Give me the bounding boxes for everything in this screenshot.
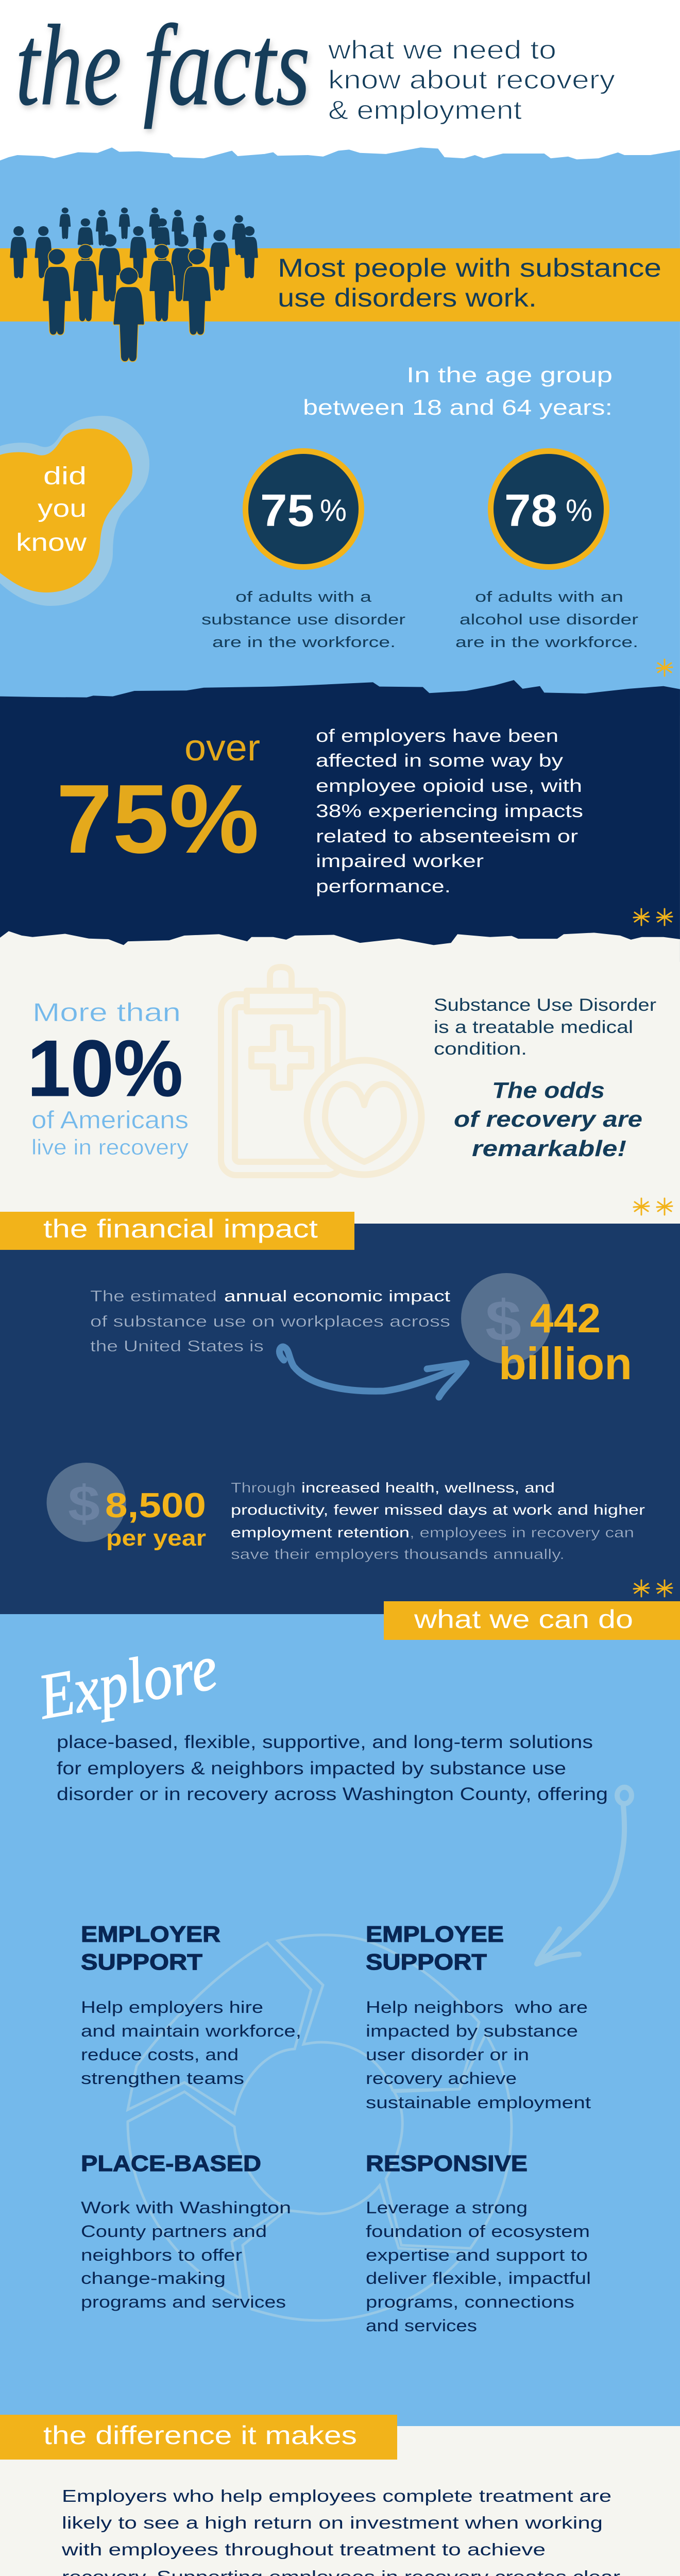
age group heading: between 18 and 64 years:: [303, 395, 613, 419]
text: employers return on investment: with employees throughout treatment to achieve: [61, 2540, 546, 2559]
card: responsive: deliver flexible, impactful: [366, 2269, 591, 2287]
text: employers affected: performance.: [316, 876, 451, 896]
panel: white header background: [0, 0, 680, 206]
stat: 10 percent of Americans: [27, 998, 189, 1159]
icon: circular arrows watermark: [128, 1935, 512, 2320]
heading: the financial impact: [0, 1212, 354, 1250]
panel: did you know section background: [0, 147, 680, 716]
card: responsive: [366, 2151, 591, 2335]
title: facts: [143, 1, 310, 129]
text: employee savings: Through: [231, 1480, 296, 1496]
card: responsive: Leverage a strong: [366, 2198, 528, 2217]
yellow headline band: use disorders work.: [278, 283, 537, 312]
stat: 8,500 per year: 8,500: [105, 1486, 206, 1525]
callout: did you know blob: [0, 416, 149, 606]
card: place-based: Work with Washington: [81, 2198, 291, 2217]
heading: Explore: Explore: [32, 1632, 223, 1733]
text: employers affected: [316, 726, 583, 896]
text: employers affected: related to absenteeism or: [316, 826, 578, 846]
text: employers affected: 38% experiencing impacts: [316, 801, 583, 821]
callout: the odds of recovery: of recovery are: [454, 1107, 642, 1132]
stat: 10 percent of Americans: of Americans: [31, 1107, 189, 1134]
card: employee support: [366, 1922, 591, 2112]
card: responsive: expertise and support to: [366, 2246, 588, 2264]
stat: 75 percent of adults: substance use disorder: [201, 612, 405, 628]
text: employers return on investment: likely to see a high return on investment when working: [62, 2513, 603, 2532]
stat: 442 billion: 442: [530, 1295, 601, 1341]
card: place-based: change-making: [81, 2269, 226, 2287]
heading: the financial impact: the financial impact: [43, 1214, 318, 1243]
stat: 75 percent of adults: 75: [260, 485, 314, 536]
stat: 78 percent of adults: of adults with an: [475, 589, 623, 605]
card: employer support: EMPLOYER: [81, 1922, 220, 1947]
stat: 78 percent of adults: alcohol use disorder: [460, 612, 638, 628]
stat: 8,500 per year: per year: [106, 1526, 206, 1551]
card: employee support: SUPPORT: [366, 1950, 487, 1975]
callout: the odds of recovery: [454, 1078, 642, 1161]
text: explore intro: [57, 1732, 608, 1804]
stat: 8,500 per year: [46, 1463, 206, 1551]
text: employee savings: [231, 1480, 645, 1562]
text: employers return on investment: Employers who help employees complete treatment are: [62, 2486, 611, 2505]
heading: what we can do: [384, 1601, 680, 1640]
panel: the difference it makes section: [0, 2426, 680, 2576]
yellow headline band: [0, 248, 680, 321]
text: explore intro: place-based, flexible, supportive, and long-term solutions: [57, 1732, 593, 1752]
text: employee savings: productivity, fewer missed days at work and higher: [231, 1502, 645, 1518]
panel: what we can do section: [0, 1614, 680, 2426]
callout: did you know blob: know: [16, 529, 87, 556]
card: employer support: SUPPORT: [81, 1950, 202, 1975]
icon: source stars: [634, 1198, 672, 1215]
heading: the difference it makes: [0, 2415, 397, 2460]
stat: 78 percent of adults: [455, 451, 638, 651]
card: employee support: EMPLOYEE: [366, 1922, 504, 1947]
card: employer support: [81, 1922, 301, 2088]
text: employers return on investment: [61, 2486, 620, 2576]
text: annual economic impact: The estimated: [90, 1287, 217, 1305]
text: treatable medical condition: Substance Use Disorder: [434, 995, 656, 1015]
stat: over 75 percent: over: [184, 727, 260, 769]
text: annual economic impact: the United States is: [90, 1337, 264, 1355]
arrow: hand drawn down arrow: [537, 1787, 632, 1964]
text: employers affected: affected in some way by: [316, 751, 564, 771]
age group heading: [303, 363, 613, 419]
icon: source star: [657, 659, 672, 676]
card: employee support: recovery achieve: [366, 2069, 517, 2088]
text: employers affected: employee opioid use, with: [316, 776, 582, 796]
text: treatable medical condition: condition.: [434, 1039, 527, 1059]
card: place-based: programs and services: [81, 2293, 286, 2311]
stat: 442 billion: $: [485, 1289, 521, 1353]
title: [15, 1, 310, 129]
callout: did you know blob: you: [38, 495, 87, 522]
stat: 8,500 per year: $: [68, 1475, 100, 1532]
text: treatable medical condition: [434, 995, 656, 1059]
text: explore intro: disorder or in recovery across Washington County, offering: [57, 1784, 608, 1804]
panel: financial impact section: [0, 1224, 680, 1614]
yellow headline band: Most people with substance: [278, 253, 661, 282]
stat: 78 percent of adults: %: [566, 493, 592, 528]
stat: 78 percent of adults: 78: [504, 485, 557, 536]
stat: 10 percent of Americans: live in recovery: [31, 1135, 189, 1159]
stat: 10 percent of Americans: More than: [32, 998, 181, 1027]
stat: 75 percent of adults: %: [320, 493, 347, 528]
text: annual economic impact: [90, 1287, 451, 1355]
text: explore intro: for employers & neighbors impacted by substance use: [57, 1758, 566, 1778]
stat: over 75 percent: 75%: [56, 765, 259, 874]
card: employer support: and maintain workforce,: [81, 2022, 301, 2040]
card: employee support: user disorder or in: [366, 2045, 529, 2064]
subtitle: [328, 35, 616, 125]
subtitle: know about recovery: [328, 65, 616, 94]
heading: what we can do: what we can do: [414, 1605, 633, 1634]
stat: 442 billion: [461, 1273, 632, 1389]
callout: the odds of recovery: remarkable!: [472, 1136, 626, 1161]
stat: 75 percent of adults: of adults with a: [235, 589, 372, 605]
stat: 442 billion: billion: [499, 1338, 632, 1389]
text: employee savings: save their employers thousands annually.: [231, 1546, 565, 1562]
text: treatable medical condition: is a treatable medical: [434, 1018, 633, 1037]
text: annual economic impact: of substance use on workplaces across: [90, 1312, 450, 1330]
panel: cream recovery section: [0, 931, 680, 1224]
card: employer support: Help employers hire: [81, 1998, 263, 2016]
stat: 78 percent of adults: are in the workforce.: [455, 634, 638, 651]
card: employee support: sustainable employment: [366, 2093, 591, 2112]
stat: 10 percent of Americans: 10%: [27, 1024, 183, 1113]
text: employee savings: , employees in recovery can: [410, 1524, 634, 1540]
card: place-based: [81, 2151, 291, 2311]
text: employee savings: increased health, wellness, and: [301, 1480, 555, 1496]
age group heading: In the age group: [406, 363, 613, 387]
card: employee support: impacted by substance: [366, 2022, 578, 2040]
card: responsive: and services: [366, 2316, 477, 2335]
card: place-based: PLACE-BASED: [81, 2151, 261, 2176]
text: annual economic impact: annual economic impact: [224, 1287, 451, 1305]
text: employee savings: employment retention: [231, 1524, 410, 1540]
card: employer support: reduce costs, and: [81, 2045, 239, 2064]
subtitle: & employment: [328, 95, 522, 125]
icon: source stars: [634, 1580, 672, 1597]
stat: 75 percent of adults: are in the workforce.: [212, 634, 396, 651]
heading: the difference it makes: the difference it makes: [43, 2421, 357, 2450]
panel: dark employers section: [0, 680, 680, 962]
subtitle: what we need to: [328, 35, 556, 64]
icon: clipboard with heart: [221, 967, 421, 1175]
card: employer support: strengthen teams: [81, 2069, 244, 2088]
text: employers affected: of employers have been: [316, 726, 558, 746]
icon: source stars: [634, 909, 672, 925]
callout: did you know blob: did: [43, 463, 87, 490]
card: place-based: neighbors to offer: [81, 2246, 242, 2264]
stat: 75 percent of adults: [201, 451, 405, 651]
card: place-based: County partners and: [81, 2222, 267, 2241]
card: responsive: foundation of ecosystem: [366, 2222, 590, 2241]
text: employers affected: impaired worker: [316, 851, 484, 871]
card: responsive: programs, connections: [366, 2293, 574, 2311]
card: responsive: RESPONSIVE: [366, 2151, 528, 2176]
arrow: to 442 billion: [279, 1347, 466, 1397]
card: employee support: Help neighbors who are: [366, 1998, 588, 2016]
icon: crowd of people: [10, 208, 258, 362]
callout: the odds of recovery: The odds: [492, 1078, 605, 1103]
title: the: [15, 1, 122, 129]
